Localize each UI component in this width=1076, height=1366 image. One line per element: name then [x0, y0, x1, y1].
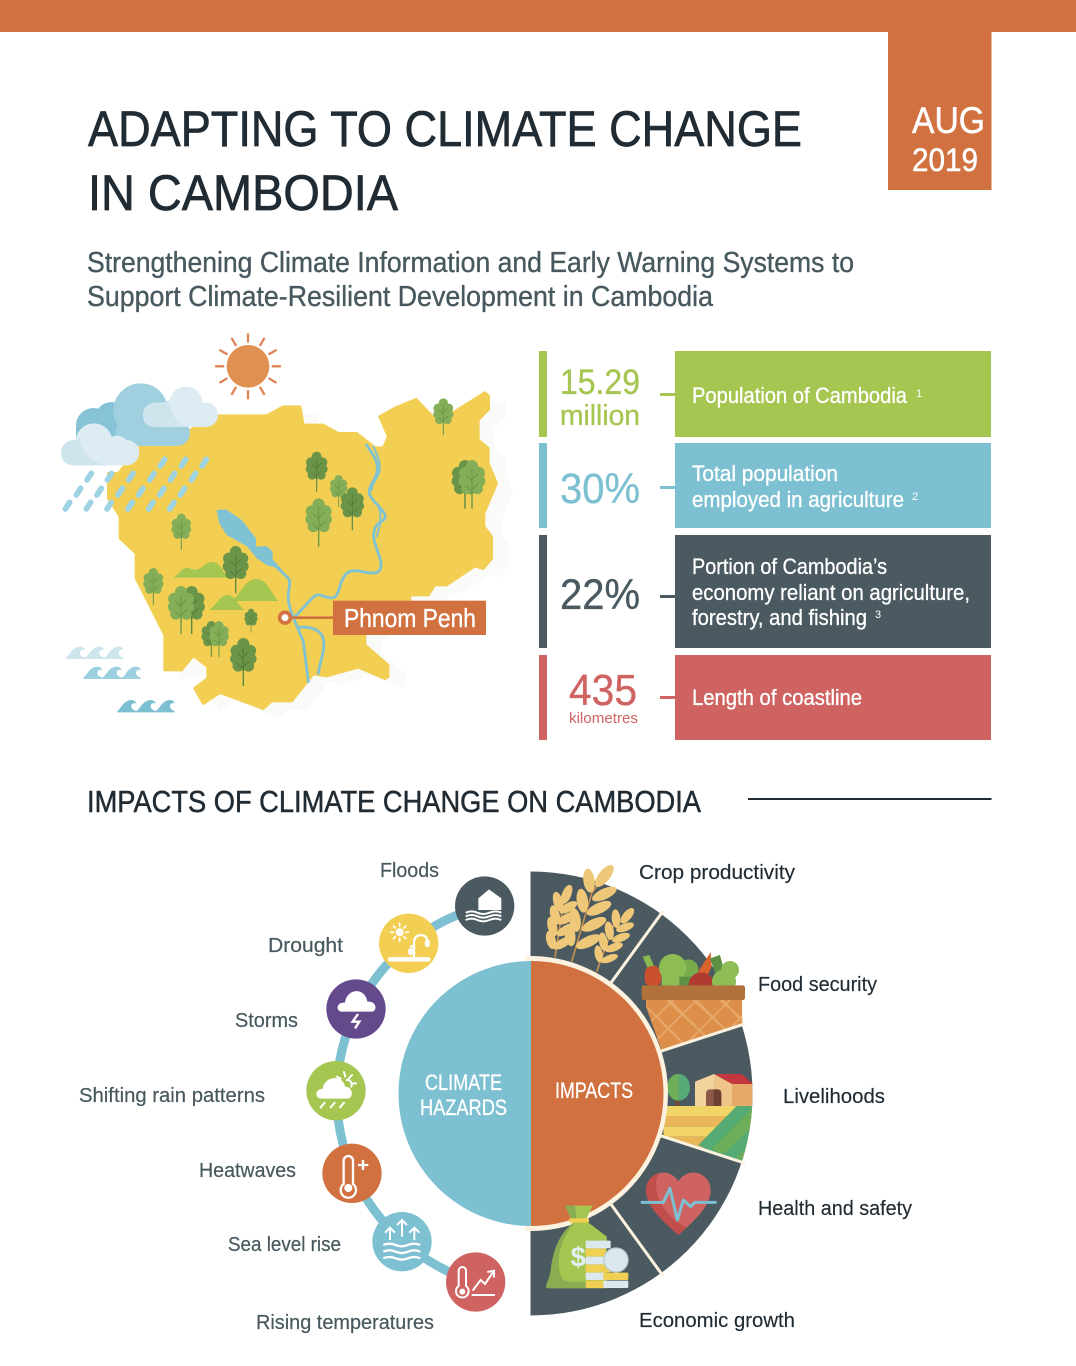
impact icons group [525, 862, 755, 1276]
stat: population: 15.29 [560, 363, 640, 402]
stat: economy reliance: economy reliant on agriculture, [692, 580, 970, 605]
stat: economy reliance [539, 535, 991, 648]
hazard icons [306, 876, 514, 1312]
stat: economy reliance: 22% [560, 571, 640, 619]
stat: population: Population of Cambodia [692, 383, 908, 408]
stat: economy reliance: 3 [875, 609, 881, 621]
icon: drought [379, 914, 438, 973]
title [88, 101, 802, 221]
icon: money bag: $ [571, 1242, 586, 1273]
icon: wheat [544, 862, 637, 972]
icon: vegetable basket [642, 952, 745, 1053]
hazard labels: Shifting rain patterns [79, 1084, 265, 1107]
impact labels: Crop productivity [639, 861, 796, 884]
icon: rising temperatures [446, 1252, 505, 1312]
stat: coastline: 435 [569, 666, 637, 715]
impacts half circle [531, 961, 664, 1226]
stat: agriculture employment: employed in agriculture [692, 487, 904, 512]
impacts diagram [306, 862, 755, 1316]
stat: agriculture employment: 2 [912, 491, 918, 503]
impact labels: Livelihoods [783, 1085, 885, 1108]
icon: floods [455, 876, 514, 936]
icon: shifting rain [306, 1061, 366, 1120]
icon: storms [326, 979, 386, 1039]
stat: coastline: Length of coastline [692, 685, 862, 710]
icon: heatwaves [322, 1144, 382, 1203]
hazard labels: Heatwaves [199, 1159, 296, 1182]
stat: agriculture employment: Total population [692, 461, 838, 486]
center labels: IMPACTS [555, 1078, 633, 1103]
top banner [0, 0, 1076, 32]
center labels: CLIMATE [425, 1070, 502, 1095]
hazard labels: Drought [268, 934, 343, 957]
lake and rivers [217, 445, 385, 682]
rain [65, 459, 206, 509]
hazard labels: Rising temperatures [256, 1311, 434, 1334]
impacts outer half disc [530, 872, 752, 1316]
impact labels: Economic growth [639, 1309, 795, 1332]
hazard labels: Floods [380, 859, 439, 882]
subtitle [87, 247, 854, 313]
stat: economy reliance: Portion of Cambodia’s [692, 554, 887, 579]
country shape [108, 393, 497, 709]
map illustration [61, 334, 514, 718]
hazard labels [79, 859, 439, 1334]
stat: agriculture employment [539, 443, 991, 528]
hills [174, 562, 278, 610]
trees [143, 398, 485, 686]
subtitle: Support Climate-Resilient Development in Cambodia [87, 281, 714, 313]
subtitle: Strengthening Climate Information and Early Warning Systems to [87, 247, 854, 279]
dividers and ring [525, 911, 745, 1276]
section heading: IMPACTS OF CLIMATE CHANGE ON CAMBODIA [87, 784, 701, 819]
center labels: HAZARDS [420, 1095, 507, 1120]
hazards half circle [399, 961, 531, 1226]
date tab [888, 32, 992, 190]
icon: sea level rise [372, 1212, 432, 1271]
icon: farm [662, 1074, 755, 1163]
icon: money bag [546, 1206, 628, 1288]
label: Phnom Penh: Phnom Penh [344, 603, 476, 633]
waves [66, 647, 175, 712]
stat: economy reliance: forestry, and fishing [692, 605, 867, 630]
impact labels [639, 861, 913, 1332]
stat: population: 1 [916, 388, 922, 400]
map shadow [123, 400, 514, 718]
hazard labels: Storms [235, 1009, 298, 1032]
sun [216, 334, 280, 398]
title: IN CAMBODIA [88, 165, 399, 221]
hazard labels: Sea level rise [228, 1233, 341, 1256]
center labels [420, 1070, 633, 1120]
clouds [61, 383, 218, 465]
Phnom Penh marker [280, 601, 486, 635]
hazards arc [337, 906, 485, 1282]
stat: population: million [560, 400, 640, 432]
impact labels: Health and safety [758, 1197, 913, 1220]
stat: agriculture employment: 30% [560, 465, 640, 513]
stat: coastline: kilometres [569, 711, 638, 727]
title: ADAPTING TO CLIMATE CHANGE [88, 101, 802, 157]
date tab: AUG [912, 100, 985, 141]
stat: coastline [539, 655, 991, 740]
stat: population [539, 351, 991, 437]
impact labels: Food security [758, 973, 878, 996]
icon: heart [642, 1173, 715, 1235]
date tab: 2019 [912, 142, 978, 178]
